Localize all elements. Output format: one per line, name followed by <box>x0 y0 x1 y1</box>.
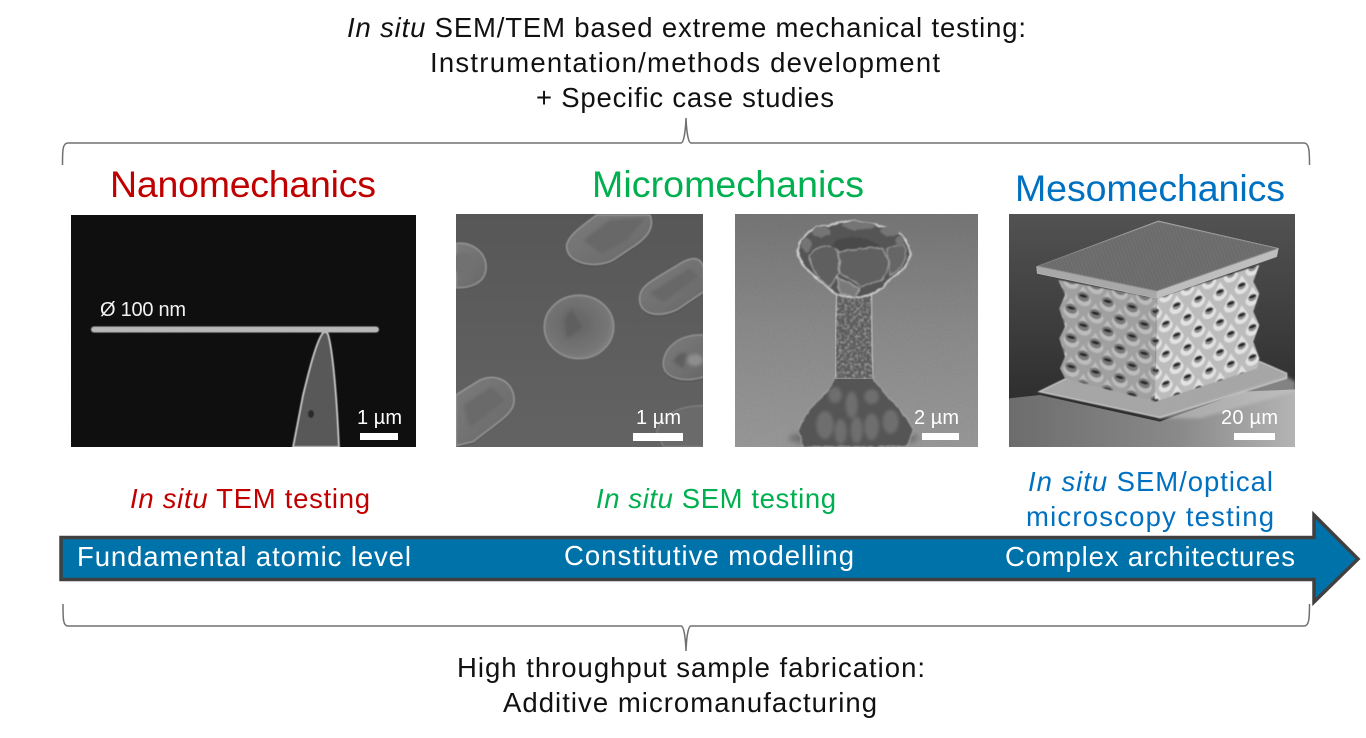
central dome <box>544 297 614 360</box>
label: In situ SEM/optical microscopy testing: In situ SEM/optical <box>1028 466 1273 497</box>
capsule top <box>580 264 604 266</box>
scale bar: 1 µm: 1 µm <box>357 407 402 429</box>
nanowire <box>91 326 379 332</box>
top brace <box>62 118 1310 165</box>
partial dome bottom right <box>657 406 705 447</box>
floor <box>1009 389 1296 447</box>
arrow: length scale <box>61 515 1358 602</box>
heading: top text block: In situ SEM/TEM based extreme mechanical testing: <box>347 12 1026 43</box>
heading: top text block <box>347 12 1026 113</box>
heading: Nanomechanics: Nanomechanics <box>110 163 376 205</box>
partial dome top left <box>456 245 486 289</box>
base <box>788 432 918 447</box>
label: In situ SEM/optical microscopy testing: microscopy testing <box>1026 501 1274 532</box>
stem <box>835 293 873 379</box>
arrow label: Fundamental atomic level: Fundamental atomic level <box>77 541 411 572</box>
text block: fabrication <box>457 652 925 718</box>
image: lattice microstructure, SEM <box>1009 214 1296 447</box>
scale bar: 20 µm <box>1222 410 1277 440</box>
label: diameter: Ø 100 nm <box>100 299 186 321</box>
heading: Mesomechanics: Mesomechanics <box>1015 167 1285 209</box>
partial capsule bottom left <box>457 423 500 447</box>
label: In situ TEM testing: In situ TEM testing <box>130 483 370 514</box>
scale bar: 1 µm <box>358 410 401 440</box>
image: nanowire on tip, TEM <box>71 215 416 447</box>
scale bar: 2 µm: 2 µm <box>914 407 959 429</box>
head <box>798 222 910 297</box>
image: micropillars, SEM <box>451 214 705 447</box>
label: In situ SEM/optical microscopy testing <box>1026 466 1274 532</box>
heading: top text block: Instrumentation/methods development <box>430 47 940 78</box>
text block: fabrication: Additive micromanufacturing <box>503 687 877 718</box>
label: In situ SEM testing: In situ SEM testing <box>596 483 836 514</box>
text block: fabrication: High throughput sample fabrication: <box>457 652 925 683</box>
arrow label: Complex architectures: Complex architectures <box>1005 541 1295 572</box>
scale bar: 1 µm: 1 µm <box>636 407 681 429</box>
top plate <box>1037 221 1278 298</box>
scale bar: 20 µm: 20 µm <box>1221 407 1278 429</box>
lattice left face <box>1058 280 1157 402</box>
lattice right face <box>1155 265 1259 402</box>
arrow label: Constitutive modelling: Constitutive modelling <box>564 540 854 571</box>
heading: top text block: + Specific case studies <box>536 82 834 113</box>
bottom brace <box>63 604 1310 651</box>
heading: Micromechanics: Micromechanics <box>592 163 864 205</box>
capsule lower right <box>670 377 703 382</box>
image: mushroom pillar, SEM <box>735 214 978 447</box>
scale bar: 1 µm <box>633 407 683 441</box>
capsule right <box>648 312 676 316</box>
base plate <box>1039 362 1287 418</box>
scale bar: 2 µm <box>915 410 959 440</box>
tip <box>293 332 339 447</box>
